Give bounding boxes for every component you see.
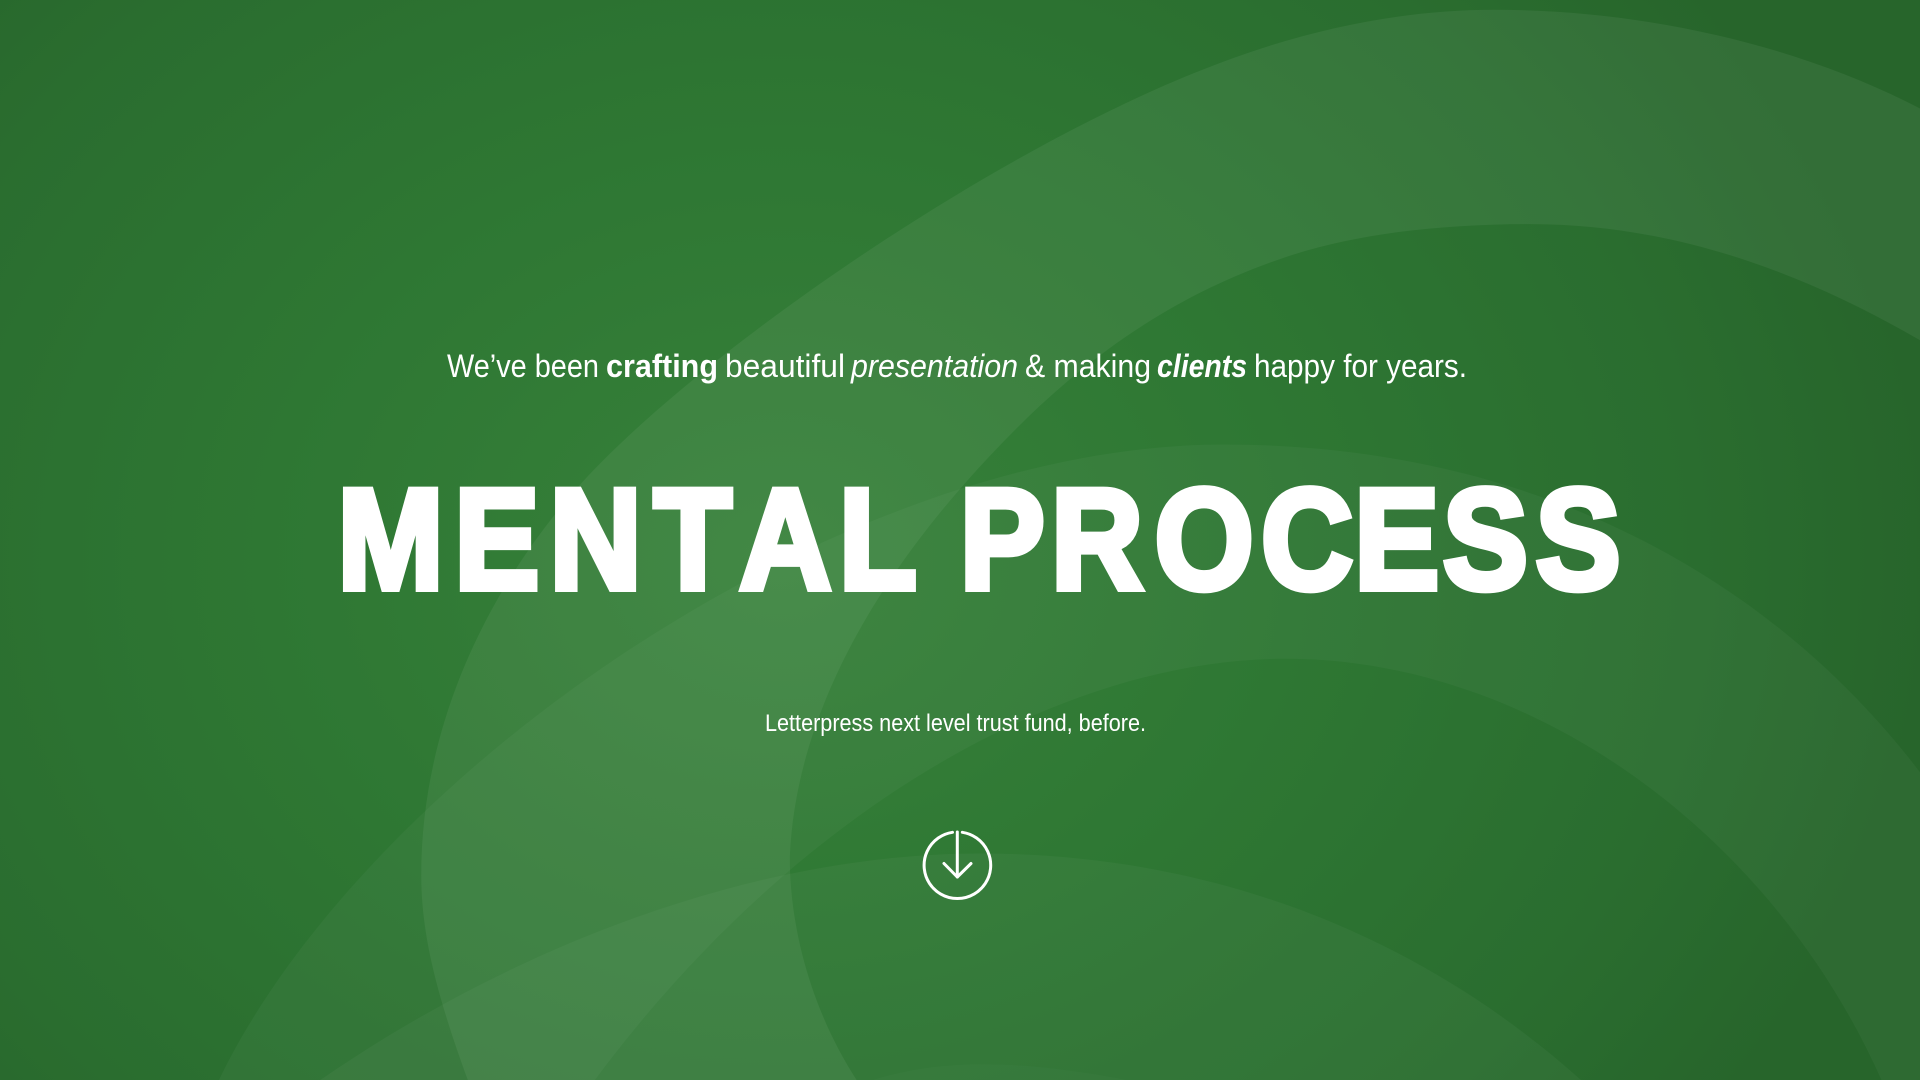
tagline: happy for years. — [1254, 348, 1467, 384]
band: lower arc — [306, 853, 1592, 1080]
icon: down arrow in circle — [924, 832, 991, 899]
tagline — [447, 348, 1467, 384]
tagline: crafting — [606, 348, 718, 384]
tagline: & making — [1025, 348, 1151, 384]
tagline: presentation — [850, 348, 1018, 384]
band: upper large arc — [421, 10, 1920, 1080]
tagline: clients — [1157, 348, 1247, 384]
band: middle arc — [214, 444, 1920, 1080]
band: faint bottom arc — [845, 1064, 1176, 1080]
tagline: beautiful — [725, 348, 845, 384]
main title: MENTAL PROCESS — [338, 459, 1621, 619]
tagline: We’ve been — [447, 348, 599, 384]
subtitle: Letterpress next level trust fund, before. — [765, 710, 1146, 737]
